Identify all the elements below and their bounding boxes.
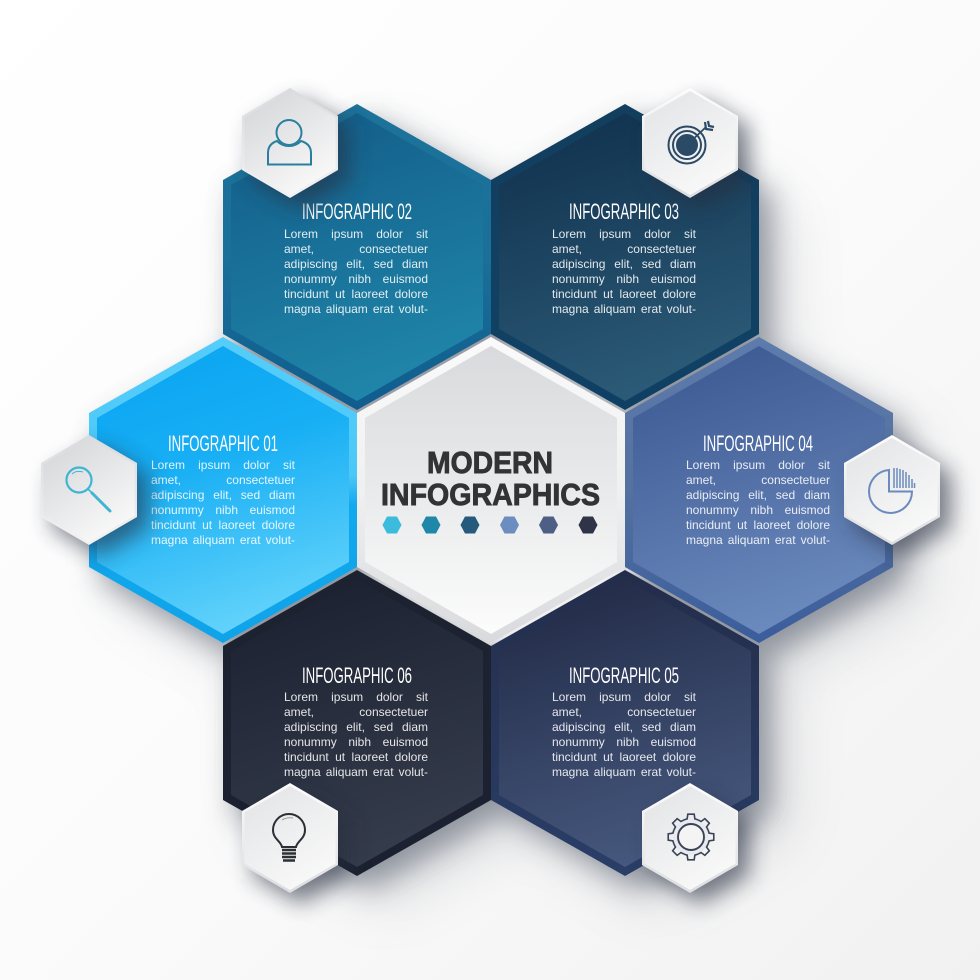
icon: light bulb [273,814,305,860]
title: MODERN [427,445,553,480]
text block 02: tincidunt ut laoreet dolore [284,287,428,301]
text block 05: nonummy nibh euismod [552,735,696,749]
icon: target [668,121,714,164]
text block 04 [686,458,830,548]
text block 03: tincidunt ut laoreet dolore [552,287,696,301]
panel: infographic 05 [491,570,759,876]
icon badge: person [242,88,338,198]
cluster soft shadow [119,134,923,906]
text block 01: nonummy nibh euismod [151,503,295,517]
text block 03: nonummy nibh euismod [552,272,696,286]
cluster near shadow [101,118,905,890]
text block 03: magna aliquam erat volut- [552,302,696,316]
text block 04: tincidunt ut laoreet dolore [686,518,830,532]
heading 04: INFOGRAPHIC 04 [703,431,813,456]
text block 04: Lorem ipsum dolor sit [686,458,830,472]
heading 01: INFOGRAPHIC 01 [168,431,278,456]
text block 02: Lorem ipsum dolor sit [284,227,428,241]
text block 05: amet, consectetuer [552,705,696,719]
icon: person [268,120,311,164]
text block 01: tincidunt ut laoreet dolore [151,518,295,532]
icon badge: light bulb [242,783,338,893]
text block 06: nonummy nibh euismod [284,735,428,749]
text block 03: Lorem ipsum dolor sit [552,227,696,241]
text block 01 [151,458,295,548]
text block 06 [284,690,428,780]
panel: infographic 01 [89,337,357,643]
panel: infographic 04 [625,337,893,643]
text block 05: adipiscing elit, sed diam [552,720,696,734]
small hexagon shadows [52,99,951,904]
text block 02 [284,227,428,317]
heading 05: INFOGRAPHIC 05 [569,663,679,688]
text block 03 [552,227,696,317]
text block 05 [552,690,696,780]
panel: infographic 03 [491,104,759,410]
text block 04: magna aliquam erat volut- [686,533,830,547]
heading 03: INFOGRAPHIC 03 [569,199,679,224]
icon badge: target [642,88,738,198]
icon badge: gear [642,783,738,893]
panel: center hexagon [357,337,625,643]
heading 02: INFOGRAPHIC 02 [302,199,412,224]
text block 06: Lorem ipsum dolor sit [284,690,428,704]
title [381,445,600,512]
text block 03: amet, consectetuer [552,242,696,256]
text block 04: adipiscing elit, sed diam [686,488,830,502]
text block 04: amet, consectetuer [686,473,830,487]
text block 06: magna aliquam erat volut- [284,765,428,779]
text block 06: amet, consectetuer [284,705,428,719]
text block 01: amet, consectetuer [151,473,295,487]
text block 05: magna aliquam erat volut- [552,765,696,779]
text block 02: adipiscing elit, sed diam [284,257,428,271]
panel: infographic 06 [223,570,491,876]
icon: magnifier [66,468,110,511]
title: INFOGRAPHICS [381,477,600,512]
text block 03: adipiscing elit, sed diam [552,257,696,271]
icon badge: pie chart [844,435,940,545]
text block 01: adipiscing elit, sed diam [151,488,295,502]
text block 05: tincidunt ut laoreet dolore [552,750,696,764]
text block 01: Lorem ipsum dolor sit [151,458,295,472]
icon: pie chart [869,468,914,513]
colour dots [382,516,598,534]
panel: infographic 02 [223,104,491,410]
text block 05: Lorem ipsum dolor sit [552,690,696,704]
icon badge: magnifier [41,435,137,545]
text block 06: tincidunt ut laoreet dolore [284,750,428,764]
text block 06: adipiscing elit, sed diam [284,720,428,734]
text block 04: nonummy nibh euismod [686,503,830,517]
text block 02: amet, consectetuer [284,242,428,256]
text block 02: nonummy nibh euismod [284,272,428,286]
text block 01: magna aliquam erat volut- [151,533,295,547]
heading 06: INFOGRAPHIC 06 [302,663,412,688]
icon: gear [668,814,714,860]
text block 02: magna aliquam erat volut- [284,302,428,316]
